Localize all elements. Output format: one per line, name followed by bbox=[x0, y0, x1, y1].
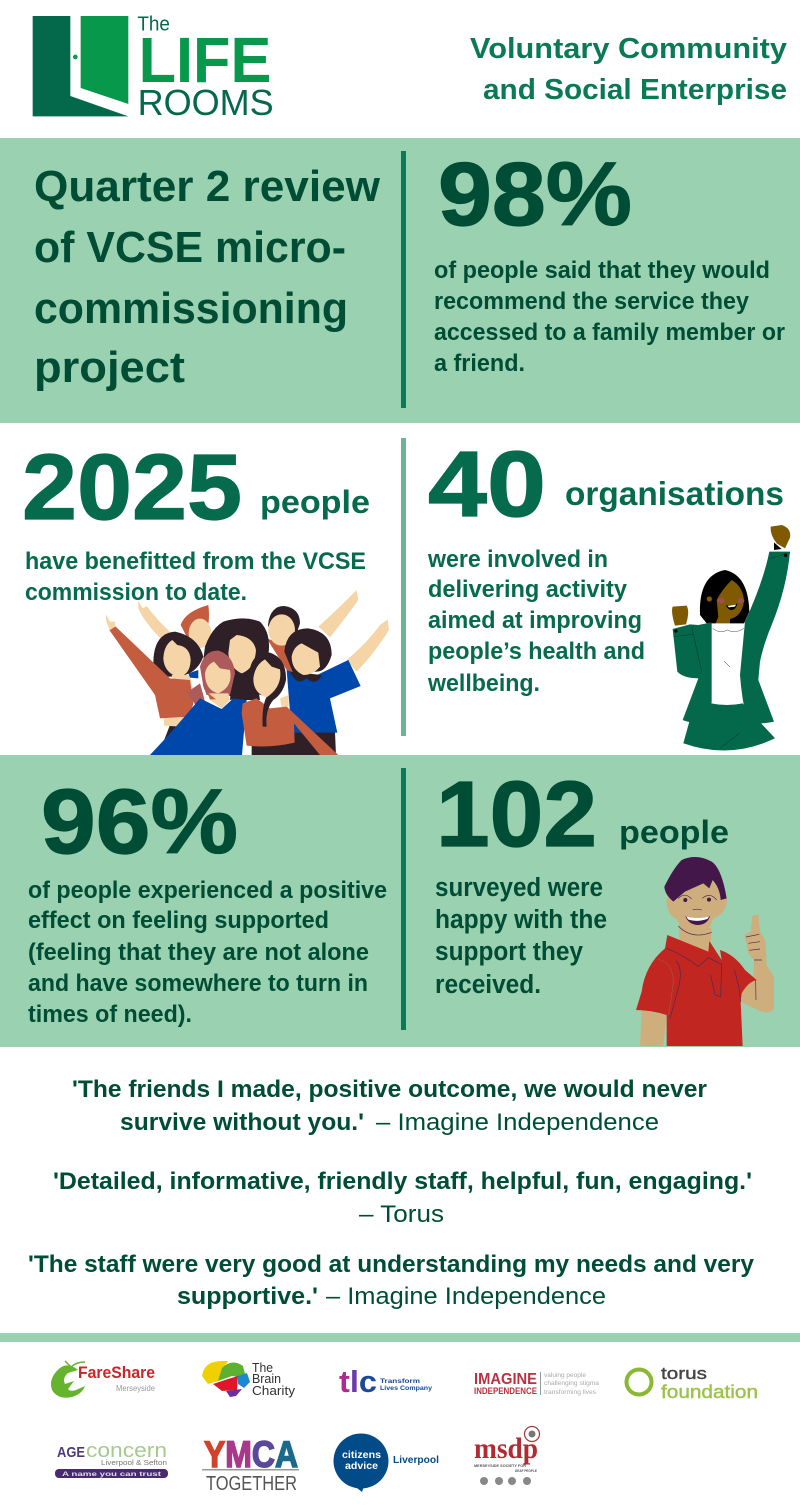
quote 1: 'The friends I made, positive outcome, we would never bbox=[72, 1076, 707, 1103]
stat: 98%: accessed to a family member or bbox=[434, 319, 785, 346]
illustration: boy with thumbs up bbox=[636, 857, 774, 1046]
logo: The Life Rooms bbox=[33, 13, 274, 123]
logo: Imagine Independence: transforming lives bbox=[544, 1389, 597, 1396]
logo: YMCA Together bbox=[202, 1434, 299, 1495]
stat: 40 organisations: aimed at improving bbox=[428, 607, 642, 634]
quote 3 bbox=[28, 1251, 755, 1310]
quote 1: survive without you.' bbox=[120, 1109, 364, 1136]
divider bar 1 bbox=[401, 151, 406, 408]
logo: Imagine Independence: IMAGINE bbox=[474, 1371, 537, 1388]
stat: 2025 people bbox=[22, 435, 370, 606]
logo: Imagine Independence bbox=[474, 1371, 599, 1396]
logo: TLC: Transform bbox=[380, 1378, 420, 1385]
quote 1: – Imagine Independence bbox=[376, 1109, 659, 1136]
logo: FareShare: FareShare bbox=[78, 1364, 155, 1382]
stat: 2025 people: have benefitted from the VCSE bbox=[25, 548, 366, 575]
quote 2 bbox=[53, 1168, 752, 1228]
stat: 2025 people: commission to date. bbox=[25, 579, 247, 606]
logo: The Life Rooms: LIFE bbox=[139, 24, 271, 96]
stat: 98%: of people said that they would bbox=[434, 257, 770, 284]
logo: TLC: tlc bbox=[339, 1364, 377, 1399]
logo: Citizens Advice: Liverpool bbox=[393, 1454, 439, 1466]
quote 2: – Torus bbox=[359, 1201, 444, 1228]
stat: 102 people bbox=[435, 762, 729, 999]
logo: The Life Rooms: The bbox=[137, 13, 170, 36]
stat: 96%: (feeling that they are not alone bbox=[28, 939, 369, 966]
quote 1 bbox=[72, 1076, 707, 1136]
logo: FareShare: Merseyside bbox=[116, 1384, 156, 1393]
logo: YMCA Together: YMCA bbox=[204, 1434, 298, 1475]
heading: voluntary community: and Social Enterprise bbox=[483, 74, 787, 106]
logo: TLC bbox=[339, 1364, 432, 1399]
stat: 102 people: people bbox=[619, 814, 729, 850]
stat: 102 people: support they bbox=[435, 938, 584, 966]
logo: The Brain Charity: Brain bbox=[252, 1372, 281, 1386]
stat: 40 organisations bbox=[427, 432, 784, 697]
quote 3: – Imagine Independence bbox=[326, 1283, 606, 1310]
logo: Imagine Independence: INDEPENDENCE bbox=[474, 1386, 537, 1396]
heading: voluntary community: Voluntary Community bbox=[470, 33, 787, 65]
illustration: woman with raised fist bbox=[672, 525, 790, 751]
stat: 102 people: surveyed were bbox=[435, 874, 603, 902]
stat: 102 people: received. bbox=[435, 971, 541, 999]
title: quarter 2 review: of VCSE micro- bbox=[34, 223, 346, 272]
logo: Age Concern: A name you can trust bbox=[62, 1471, 162, 1478]
stat: 96%: of people experienced a positive bbox=[28, 877, 387, 904]
heading: voluntary community bbox=[470, 33, 787, 106]
logo: The Life Rooms: ROOMS bbox=[138, 82, 274, 123]
logo: TLC: Lives Company bbox=[380, 1385, 432, 1392]
panel: top stats background bbox=[0, 138, 800, 423]
logo: The Brain Charity bbox=[202, 1361, 296, 1398]
stat: 98%: recommend the service they bbox=[434, 288, 749, 315]
logo: MSDP: MERSEYSIDE SOCIETY FOR bbox=[474, 1464, 527, 1468]
stat: 40 organisations: were involved in bbox=[427, 546, 608, 573]
logo: Imagine Independence: challenging stigma bbox=[544, 1380, 599, 1387]
stat: 40 organisations: wellbeing. bbox=[427, 670, 540, 697]
stat: 2025 people: 2025 bbox=[22, 435, 242, 539]
logo: Age Concern: Liverpool & Sefton bbox=[101, 1460, 167, 1467]
logo: Citizens Advice: citizens bbox=[342, 1449, 381, 1461]
title: quarter 2 review: project bbox=[34, 343, 185, 392]
logo: Citizens Advice: advice bbox=[345, 1460, 378, 1472]
logo: MSDP: msdp bbox=[474, 1432, 538, 1465]
logo: MSDP bbox=[474, 1426, 540, 1485]
stat: 96%: times of need). bbox=[28, 1001, 192, 1028]
logo: Age Concern bbox=[55, 1440, 168, 1478]
stat: 102 people: 102 bbox=[436, 762, 597, 866]
partner logos bbox=[51, 1361, 758, 1495]
divider bar 2 bbox=[401, 438, 406, 736]
logo: torus foundation: torus bbox=[661, 1364, 707, 1383]
title: quarter 2 review: Quarter 2 review bbox=[34, 162, 381, 211]
stat: 98% bbox=[434, 145, 785, 377]
logo: The Brain Charity: The bbox=[252, 1361, 273, 1375]
logo: torus foundation bbox=[626, 1364, 758, 1402]
stat: 96%: 96% bbox=[41, 771, 238, 873]
stat: 96%: and have somewhere to turn in bbox=[28, 970, 368, 997]
panel: lower stats background bbox=[0, 755, 800, 1047]
stat: 40 organisations: people’s health and bbox=[428, 638, 645, 665]
logo: Imagine Independence: valuing people bbox=[544, 1372, 586, 1379]
quote 3: supportive.' bbox=[177, 1283, 318, 1310]
quote 3: 'The staff were very good at understanding my needs and very bbox=[28, 1251, 755, 1278]
stat: 102 people: happy with the bbox=[435, 906, 607, 934]
divider bar 3 bbox=[401, 768, 406, 1030]
stat: 98%: a friend. bbox=[434, 350, 525, 377]
stat: 40 organisations: delivering activity bbox=[428, 576, 627, 603]
title: quarter 2 review: commissioning bbox=[34, 284, 348, 333]
stat: 2025 people: people bbox=[260, 484, 370, 520]
logo: FareShare bbox=[51, 1361, 156, 1398]
title: quarter 2 review bbox=[34, 162, 381, 392]
stat: 40 organisations: organisations bbox=[565, 475, 784, 512]
stat: 96%: effect on feeling supported bbox=[28, 907, 329, 934]
stat: 98%: 98% bbox=[438, 145, 632, 245]
stat: 96% bbox=[28, 771, 387, 1028]
illustration: group of people bbox=[106, 590, 389, 755]
footer strip bbox=[0, 1333, 800, 1342]
logo: Citizens Advice bbox=[334, 1434, 439, 1492]
logo: Age Concern: AGE bbox=[57, 1444, 85, 1461]
stat: 40 organisations: 40 bbox=[428, 432, 546, 536]
logo: Age Concern: concern bbox=[86, 1440, 167, 1462]
logo: The Brain Charity: Charity bbox=[252, 1384, 296, 1398]
logo: MSDP: DEAF PEOPLE bbox=[515, 1469, 538, 1473]
logo: YMCA Together: TOGETHER bbox=[206, 1473, 297, 1495]
quote 2: 'Detailed, informative, friendly staff, helpful, fun, engaging.' bbox=[53, 1168, 752, 1195]
logo: torus foundation: foundation bbox=[661, 1382, 758, 1402]
